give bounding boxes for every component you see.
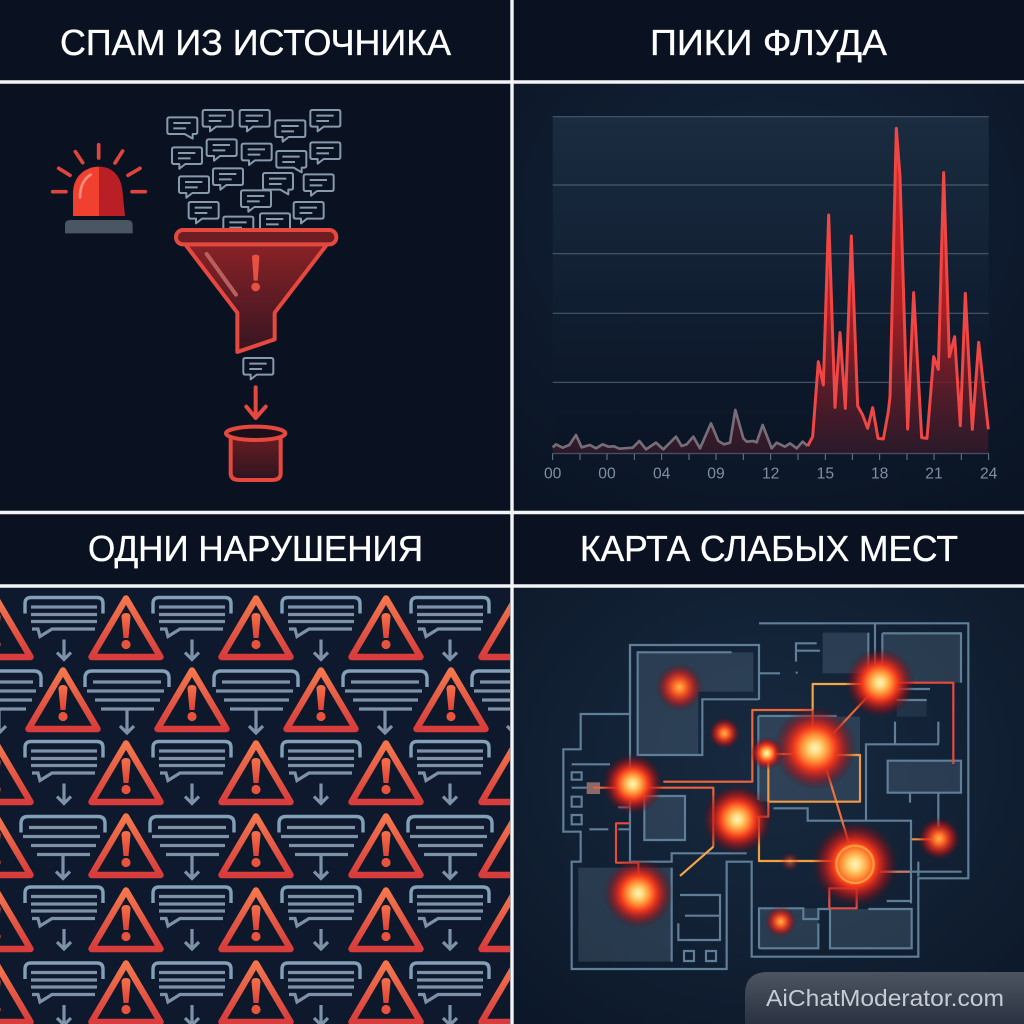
small node (587, 782, 600, 794)
axis labels: hours: 12 (762, 465, 779, 482)
room fills (578, 633, 961, 962)
axis labels: hours: 09 (707, 465, 725, 482)
icon: chat bubbles pouring in (167, 110, 340, 238)
heat spots (602, 648, 961, 938)
axis labels: hours: 21 (925, 465, 943, 482)
axis labels: hours: 24 (980, 465, 998, 482)
icon: funnel with warning (176, 230, 336, 352)
panel background (514, 588, 1024, 1024)
arrow: down to container (246, 387, 266, 418)
pattern: warning triangles and messages (0, 588, 556, 1024)
heading: spam from the source: СПАМ ИЗ ИСТОЧНИКА (60, 22, 451, 63)
axis labels: hours (544, 465, 998, 482)
panel: spam from the source (53, 22, 451, 480)
axis labels: hours: 18 (871, 465, 889, 482)
panel: nothing but violations (0, 528, 556, 1024)
illustration group (53, 110, 340, 480)
line chart: flood over 24 hours (544, 117, 998, 482)
floor plan map (563, 623, 968, 969)
panel: weak spots map (514, 528, 1024, 1024)
axis labels: hours: 00 (598, 465, 616, 482)
axis labels: hours: 00 (544, 465, 562, 482)
watermark badge: AiChatModerator.com (766, 985, 1004, 1011)
icon: red siren (53, 145, 145, 233)
circuit lines (593, 683, 953, 908)
panel: flood peaks (514, 22, 1024, 512)
axis labels: hours: 04 (653, 465, 671, 482)
icon: container (226, 427, 285, 480)
heading: weak spots map: КАРТА СЛАБЫХ МЕСТ (580, 528, 958, 569)
axis labels: hours: 15 (817, 465, 834, 482)
heading: flood peaks: ПИКИ ФЛУДА (650, 22, 887, 63)
watermark badge (745, 972, 1024, 1024)
icon: single message passing through (243, 358, 273, 379)
heading: nothing but violations: ОДНИ НАРУШЕНИЯ (88, 528, 423, 569)
panel background (514, 84, 1024, 512)
walls (563, 623, 968, 969)
